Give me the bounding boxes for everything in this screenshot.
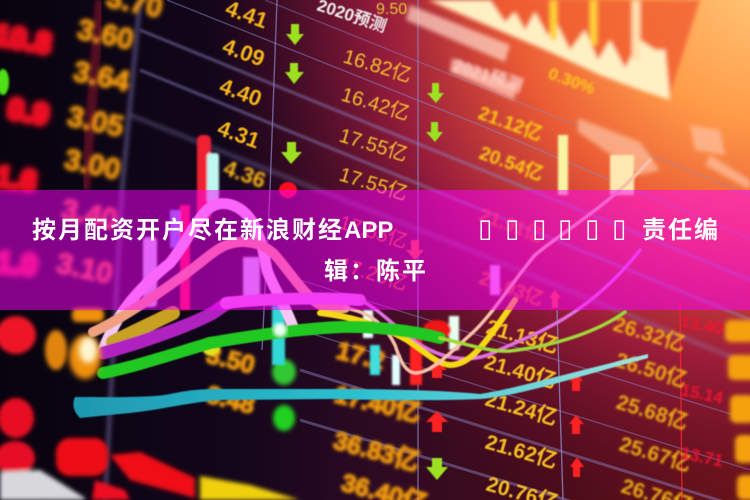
- yellow curve: [320, 300, 515, 365]
- blurred red numbers far left: 0.9: [5, 92, 52, 132]
- lower price column 25-26 yi: [611, 313, 696, 500]
- header labels: 2021预测: [451, 56, 525, 96]
- price column 16-17 yi: 17.55亿: [337, 124, 410, 166]
- pale pink band: [103, 204, 293, 350]
- caption text: 责任编: [642, 217, 720, 244]
- arrows: green down, red up: [279, 24, 584, 480]
- teal curve: [73, 354, 648, 418]
- thin magenta curve: [360, 250, 640, 359]
- price column 16-17 yi: 16.42亿: [339, 83, 412, 125]
- bright node at the start of curves: [69, 323, 287, 379]
- sharp price column 4.xx: 4.36: [220, 155, 269, 193]
- caption text: 按月配资开户尽在新浪财经APP: [32, 217, 393, 244]
- blurred price column left: 3.60: [75, 14, 136, 57]
- blurred price column left: [54, 0, 165, 291]
- blurred lower-left number blocks: 36.83亿: [330, 427, 422, 476]
- price column 20-21 yi: [475, 102, 546, 310]
- sharp price column 4.xx: 4.09: [219, 33, 268, 71]
- banner overlay: [0, 190, 750, 310]
- blurred lower-left number blocks: 3.50: [204, 341, 258, 380]
- price column 16-17 yi: 17.55亿: [337, 163, 410, 205]
- caption text: ▯: [532, 214, 546, 244]
- blurred price column left: 3.10: [54, 248, 115, 291]
- blurred price column left: 3.00: [62, 144, 123, 187]
- blurred lower-left number blocks: 17.2: [334, 337, 388, 376]
- olive band: [113, 313, 173, 342]
- price column 20-21 yi: 21.91亿: [476, 204, 546, 247]
- lower price column 25-26 yi: 25.68亿: [614, 391, 691, 434]
- blurred red numbers far left: [0, 18, 54, 283]
- sharp price column 4.xx: [214, 0, 271, 193]
- caption text: ▯: [558, 214, 572, 244]
- green curve: [103, 327, 440, 373]
- price column 20-21 yi: 21.03亿: [476, 267, 546, 310]
- lower price column 21 yi: 21.62亿: [483, 431, 560, 473]
- lower price column 21 yi: 21.40亿: [482, 351, 559, 393]
- pale thin curve: [345, 160, 650, 373]
- light magenta band in banner: [226, 299, 360, 303]
- red change figures: [679, 311, 725, 471]
- blurred price column left: 3.64: [71, 56, 132, 99]
- caption text: [32, 214, 720, 285]
- lower price column 21 yi: 21.24亿: [483, 388, 560, 430]
- top histogram chart: [406, 0, 750, 190]
- blurred lower-left number blocks: [0, 308, 430, 500]
- blurred lower-left number blocks: 17.40亿: [332, 381, 423, 428]
- green tick mark far left: [0, 69, 9, 95]
- header labels: [315, 0, 597, 98]
- moving-average lines: [93, 160, 650, 373]
- orange band: [93, 242, 345, 332]
- header labels: 9.50: [376, 1, 407, 18]
- right edge blurred numbers: [725, 320, 750, 500]
- caption text: ▯: [585, 214, 599, 244]
- sharp price column 4.xx: 4.40: [216, 73, 265, 111]
- blurred lower-left number blocks: 3.48: [204, 381, 258, 420]
- lower price column 21 yi: [482, 316, 561, 500]
- red change figures: 13.40: [679, 311, 725, 339]
- blurred price column left: 3.05: [65, 101, 126, 144]
- lower price column 25-26 yi: 25.67亿: [617, 433, 694, 476]
- price column 20-21 yi: 21.12亿: [475, 102, 545, 145]
- caption text: 辑：陈平: [324, 258, 428, 285]
- red change figures: 15.14: [679, 380, 725, 408]
- price column 16-17 yi: 17.20亿: [337, 253, 410, 295]
- red change figures: 13.71: [679, 443, 725, 471]
- blurred price column left: 3.40: [59, 194, 120, 237]
- candlestick bars: [143, 135, 634, 385]
- lower price column 25-26 yi: 26.32亿: [611, 313, 688, 356]
- price column 16-17 yi: 16.82亿: [341, 45, 414, 87]
- price column 20-21 yi: 20.54亿: [476, 142, 546, 185]
- caption text: ▯: [612, 214, 626, 244]
- price column 16-17 yi: 17.55亿: [337, 211, 410, 253]
- lower price column 21 yi: 21.13亿: [484, 316, 561, 358]
- caption text: ▯: [478, 214, 492, 244]
- purple band: [103, 303, 228, 353]
- caption text: ▯: [505, 214, 519, 244]
- lower price column 25-26 yi: 26.50亿: [613, 349, 690, 392]
- sharp price column 4.xx: 4.31: [214, 115, 263, 153]
- header labels: 0.30%: [546, 64, 597, 98]
- price column 16-17 yi: [337, 45, 414, 295]
